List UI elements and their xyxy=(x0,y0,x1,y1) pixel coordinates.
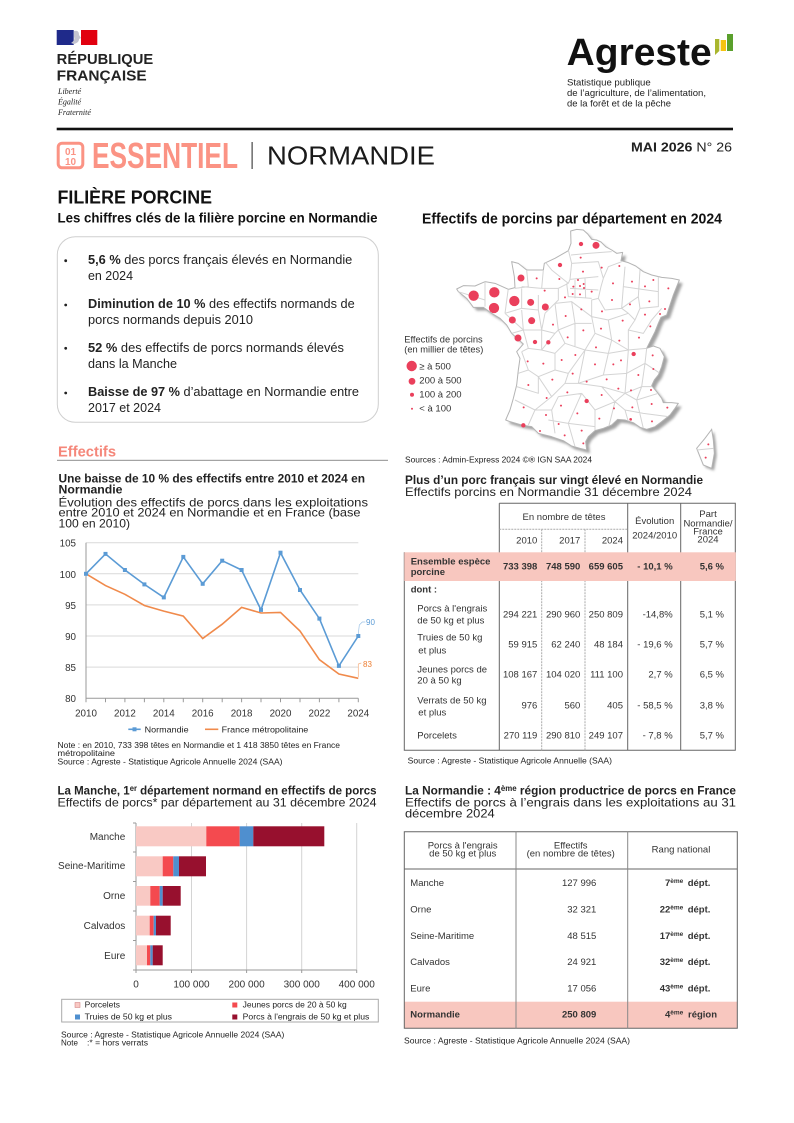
table heading: La Normandie 4ème région xyxy=(405,783,736,820)
section heading: Effectifs: Effectifs xyxy=(58,445,116,461)
row: Eure: dépt. xyxy=(688,984,710,995)
chart heading: baisse des effectifs: Évolution des effectifs de porcs dans les exploitations xyxy=(58,495,368,510)
table header: Effectifs xyxy=(554,840,588,851)
panel: key figures: 2017 et 2024 xyxy=(88,401,161,415)
category labels: Manche xyxy=(90,832,126,843)
row: Verrats xyxy=(417,696,725,719)
table header: Rang national xyxy=(652,844,710,855)
chart heading: baisse des effectifs: Normandie xyxy=(58,482,123,496)
row: Truies: Truies de 50 kg xyxy=(417,633,482,644)
map legend: 200 à 500 xyxy=(419,376,462,387)
chart legend: France métropolitaine xyxy=(222,724,309,734)
row: Normandie xyxy=(410,1010,717,1021)
row: Eure: Eure xyxy=(410,984,430,995)
chart heading: La Manche xyxy=(58,783,377,810)
row: Calvados xyxy=(410,957,710,968)
row: Seine-Maritime: ème xyxy=(670,931,684,938)
row: Ensemble espèce porcine xyxy=(411,556,725,578)
map legend: ≥ à 500 xyxy=(419,362,451,373)
table header: 2010 xyxy=(516,536,537,547)
row: Orne xyxy=(410,905,710,916)
panel: key figures: Diminution de 10 % des effectifs normands de xyxy=(88,297,355,311)
row: Porcelets: Porcelets xyxy=(417,730,457,741)
row: Truies: - 19,6 % xyxy=(637,640,673,651)
bar chart legend: Jeunes porcs de 20 à 50 kg xyxy=(243,1001,347,1010)
icon: 01 10: 01 xyxy=(65,147,76,158)
logo: Agreste: Statistique publique xyxy=(567,78,651,88)
series: France métropolitaine xyxy=(86,574,358,678)
chart heading: baisse des effectifs xyxy=(58,471,368,530)
row: Truies xyxy=(417,633,725,656)
row: Porcs à l'engrais xyxy=(417,604,725,626)
map dots: 100 to 200 xyxy=(521,242,636,427)
map heading: Effectifs de porcins par département en 2024 xyxy=(422,211,722,227)
row: Verrats: 3,8 % xyxy=(700,701,725,712)
panel: key figures: 5,6 % des porcs français élevés en Normandie xyxy=(88,253,352,267)
logo: République Française: Liberté xyxy=(57,87,82,96)
y axis labels: 85 xyxy=(65,663,77,674)
row: Eure: 17 056 xyxy=(567,984,596,995)
row: Porcs à l'engrais: 290 960 xyxy=(546,609,580,620)
row: Manche: 7 xyxy=(665,878,670,889)
chart note and source: Note : en 2010, 733 398 têtes en Normandie et 1 418 3850 têtes en France xyxy=(58,741,341,750)
row: Seine-Maritime: dépt. xyxy=(688,931,710,942)
heading: Filière porcine: FILIÈRE PORCINE xyxy=(58,187,212,208)
row: Calvados: ème xyxy=(670,957,684,964)
y axis labels: 90 xyxy=(65,632,77,643)
row: Normandie: ème xyxy=(670,1010,684,1017)
y axis labels: 80 xyxy=(65,694,77,705)
row: Ensemble espèce porcine: 748 590 xyxy=(546,562,580,573)
table header: de 50 kg et plus xyxy=(429,849,496,860)
chart heading: La Manche: er xyxy=(130,784,137,793)
table heading: La Normandie 4ème région: Effectifs de porcs à l’engrais dans les exploitations au 31 xyxy=(405,796,736,810)
logo: République Française xyxy=(57,30,154,117)
row: Porcelets: 290 810 xyxy=(546,730,580,741)
row: Manche: 127 996 xyxy=(562,878,596,889)
row: Ensemble espèce porcine: porcine xyxy=(411,567,445,578)
bar chart legend: Porcelets xyxy=(85,1001,120,1010)
row: Jeunes porcs: 104 020 xyxy=(546,670,580,681)
logo: République Française: Égalité xyxy=(57,96,82,106)
map legend: 100 à 200 xyxy=(419,390,462,401)
row: Calvados: 32 xyxy=(660,957,670,968)
row: Truies: 48 184 xyxy=(594,640,623,651)
value axis labels xyxy=(133,980,375,991)
table header: France xyxy=(693,526,723,538)
bar chart legend xyxy=(62,999,378,1022)
table heading: Plus d'un porc français: Plus d’un porc français sur vingt élevé en Normandie xyxy=(405,473,703,487)
row: Ensemble espèce porcine: 659 605 xyxy=(589,562,624,573)
table header: Part xyxy=(699,509,717,520)
x axis labels: 2022 xyxy=(309,709,330,720)
table header: Évolution xyxy=(635,516,674,527)
chart heading: La Manche: La Manche, 1 xyxy=(58,783,130,797)
row: Orne: ème xyxy=(670,905,684,912)
end labels: 83 xyxy=(363,660,372,669)
icon: 01 10: 10 xyxy=(65,157,76,168)
map legend: (en millier de têtes) xyxy=(404,344,483,355)
row: Ensemble espèce porcine: - 10,1 % xyxy=(637,562,673,573)
table header: 2017 xyxy=(559,536,580,547)
row: Eure: ème xyxy=(670,984,684,991)
table header: 2024 xyxy=(697,535,719,546)
bar chart source and note: Source : Agreste - Statistique Agricole Annuelle 2024 (SAA) xyxy=(61,1030,285,1039)
row: Porcs à l'engrais: de 50 kg et plus xyxy=(417,615,485,626)
table header: 2024 xyxy=(602,536,623,547)
table header xyxy=(428,840,710,860)
value axis labels: 0 xyxy=(133,980,139,991)
table header: 2024/2010 xyxy=(632,530,677,541)
y axis labels: 95 xyxy=(65,601,77,612)
table: rang national xyxy=(404,832,737,1028)
table heading: La Normandie 4ème région: région productrice de porcs en France xyxy=(517,783,736,797)
row: Seine-Maritime xyxy=(410,931,710,942)
row: Seine-Maritime: 17 xyxy=(660,931,670,942)
row: Manche xyxy=(410,878,710,889)
chart note and source: Source : Agreste - Statistique Agricole Annuelle 2024 (SAA) xyxy=(58,757,283,766)
value axis labels: 200 000 xyxy=(229,980,265,991)
row: Jeunes porcs: 108 167 xyxy=(503,670,537,681)
row: Porcs à l'engrais: Porcs à l'engrais xyxy=(417,604,487,615)
map dots: 200 to 500 xyxy=(509,242,599,341)
category labels: Seine-Maritime xyxy=(58,861,126,872)
bar: Calvados xyxy=(136,916,171,935)
x axis labels: 2018 xyxy=(231,709,253,720)
row: Eure: 43 xyxy=(660,984,670,995)
row: Ensemble espèce porcine: 733 398 xyxy=(503,562,537,573)
heading: Filière porcine xyxy=(58,187,378,225)
chart note and source: métropolitaine xyxy=(58,749,116,758)
row: Ensemble espèce porcine: Ensemble espèce xyxy=(411,556,490,567)
bar: Seine-Maritime xyxy=(136,856,206,876)
value axis labels: 100 000 xyxy=(173,980,210,991)
row: Truies: 62 240 xyxy=(551,640,580,651)
row: Orne: Orne xyxy=(410,905,431,916)
series: Normandie xyxy=(84,551,360,668)
table source: Source : Agreste - Statistique Agricole Annuelle (SAA) xyxy=(408,756,612,765)
row: Truies: et plus xyxy=(418,645,447,656)
row: Jeunes porcs xyxy=(417,665,725,686)
table header: (en nombre de têtes) xyxy=(527,849,615,860)
row label: dont: dont : xyxy=(411,584,437,595)
icon: 01 10 xyxy=(58,143,83,168)
category labels: Eure xyxy=(104,951,126,962)
value axis labels: 400 000 xyxy=(339,980,375,991)
map legend xyxy=(404,334,483,415)
row: Jeunes porcs: 20 à 50 kg xyxy=(417,675,462,686)
outline: Corsica xyxy=(697,429,714,468)
x axis labels: 2012 xyxy=(114,709,136,720)
bar: Orne xyxy=(136,886,181,906)
table header xyxy=(516,509,733,547)
x axis labels xyxy=(75,709,370,720)
row: Porcelets: 249 107 xyxy=(589,730,623,741)
logo: Agreste xyxy=(567,32,733,108)
row: Calvados: Calvados xyxy=(410,957,450,968)
row: Normandie: région xyxy=(688,1010,717,1021)
table header: Porcs à l'engrais xyxy=(428,840,498,851)
row: Jeunes porcs: Jeunes porcs de xyxy=(417,665,487,676)
row: Verrats: - 58,5 % xyxy=(637,701,673,712)
row: Jeunes porcs: 6,5 % xyxy=(700,670,725,681)
panel: key figures xyxy=(57,237,378,422)
row: Eure xyxy=(410,984,710,995)
x axis labels: 2024 xyxy=(347,709,370,720)
table heading: La Normandie 4ème région: La Normandie : 4 xyxy=(405,783,501,797)
table heading: La Normandie 4ème région: ème xyxy=(501,784,517,793)
stacked bar chart xyxy=(58,823,375,991)
chart legend: Normandie xyxy=(145,724,189,734)
row: Porcelets xyxy=(417,730,725,741)
chart heading: La Manche: Effectifs de porcs* par département au 31 décembre 2024 xyxy=(58,796,377,810)
row: Seine-Maritime: 48 515 xyxy=(567,931,596,942)
map source: Sources : Admin-Express 2024 ©® IGN SAA 2024 xyxy=(405,455,593,464)
map legend: < à 100 xyxy=(419,404,451,415)
chart heading: baisse des effectifs: 100 en 2010) xyxy=(58,516,130,530)
table header: En nombre de têtes xyxy=(523,512,606,523)
map dots: under 100 xyxy=(523,257,709,459)
chart heading: La Manche: département normand en effectifs de porcs xyxy=(137,783,377,797)
bar chart source and note xyxy=(61,1030,285,1047)
table: effectifs porcins xyxy=(404,503,736,750)
logo: République Française: FRANÇAISE xyxy=(57,68,147,84)
row: Seine-Maritime: Seine-Maritime xyxy=(410,931,474,942)
chart note and source xyxy=(58,741,341,766)
bar chart source and note: :* = hors verrats xyxy=(87,1038,148,1047)
panel: key figures: dans la Manche xyxy=(88,357,177,371)
y axis labels: 100 xyxy=(60,570,77,581)
row: Truies: 5,7 % xyxy=(700,640,725,651)
row: Normandie: 250 809 xyxy=(562,1010,596,1021)
panel: key figures: 52 % des effectifs de porcs normands élevés xyxy=(88,341,344,355)
category labels: Orne xyxy=(103,891,126,902)
x axis labels: 2020 xyxy=(270,709,292,720)
row: Verrats: Verrats de 50 kg xyxy=(417,696,486,707)
row: Verrats: et plus xyxy=(418,708,447,719)
row: Manche: ème xyxy=(670,878,684,885)
y axis labels xyxy=(60,539,77,705)
row: Jeunes porcs: 111 100 xyxy=(590,670,623,681)
logo: Agreste: de la forêt et de la pêche xyxy=(567,98,671,108)
value axis labels: 300 000 xyxy=(284,980,320,991)
row: Orne: 32 321 xyxy=(567,905,596,916)
table source: Source : Agreste - Statistique Agricole Annuelle 2024 (SAA) xyxy=(404,1036,630,1045)
map dots: at least 500 xyxy=(468,287,519,313)
panel: key figures: en 2024 xyxy=(88,269,133,283)
bar chart legend: Truies de 50 kg et plus xyxy=(85,1012,172,1022)
bar: Eure xyxy=(136,945,163,965)
x axis labels: 2016 xyxy=(192,709,214,720)
row: Jeunes porcs: 2,7 % xyxy=(648,670,673,681)
logo: République Française: Fraternité xyxy=(57,108,91,117)
row: Manche: dépt. xyxy=(688,878,710,889)
bar chart source and note: Note xyxy=(61,1038,78,1047)
row: Porcelets: 270 119 xyxy=(504,730,537,741)
bar chart legend: Porcs à l'engrais de 50 kg et plus xyxy=(243,1012,369,1022)
banner: Essentiel Normandie: ESSENTIEL xyxy=(92,135,238,176)
row: Porcelets: - 7,8 % xyxy=(643,730,673,741)
x axis labels: 2010 xyxy=(75,709,97,720)
banner: Essentiel Normandie: NORMANDIE xyxy=(267,141,435,171)
category labels xyxy=(58,832,126,962)
issue date: MAI 2026 N° 26 xyxy=(631,140,732,154)
bar: Manche xyxy=(136,826,324,846)
chart heading: baisse des effectifs: Une baisse de 10 % des effectifs entre 2010 et 2024 en xyxy=(58,471,365,485)
table heading: La Normandie 4ème région: décembre 2024 xyxy=(405,806,495,820)
row: Calvados: 24 921 xyxy=(567,957,596,968)
panel: key figures: Baisse de 97 % d’abattage en Normandie entre xyxy=(88,385,359,399)
heading: Filière porcine: Les chiffres clés de la filière porcine en Normandie xyxy=(58,209,378,225)
row: Porcs à l'engrais: 5,1 % xyxy=(700,609,725,620)
row: Normandie: 4 xyxy=(665,1010,670,1021)
end labels: 90 xyxy=(366,618,375,627)
row: Truies: 59 915 xyxy=(508,640,537,651)
row: Manche: Manche xyxy=(410,878,444,889)
row: Porcelets: 5,7 % xyxy=(700,730,725,741)
panel: key figures: porcs normands depuis 2010 xyxy=(88,313,253,327)
chart legend xyxy=(128,724,309,734)
table heading: Plus d'un porc français xyxy=(405,473,703,499)
x axis labels: 2014 xyxy=(153,709,175,720)
category labels: Calvados xyxy=(84,921,125,932)
table header: Normandie/ xyxy=(683,519,733,530)
row: Porcs à l'engrais: 250 809 xyxy=(589,609,623,620)
row: Calvados: dépt. xyxy=(688,957,710,968)
chart heading: baisse des effectifs: entre 2010 et 2024 en Normandie et en France (base xyxy=(58,506,361,520)
banner: Essentiel Normandie xyxy=(58,135,435,176)
logo: Agreste: de l’agriculture, de l’alimentation, xyxy=(567,88,706,98)
map legend: Effectifs de porcins xyxy=(404,334,483,345)
row: Verrats: 976 xyxy=(521,701,537,712)
end labels xyxy=(358,618,375,677)
row: Orne: dépt. xyxy=(688,905,710,916)
row: Ensemble espèce porcine: 5,6 % xyxy=(700,562,725,573)
row: Normandie: Normandie xyxy=(410,1010,460,1021)
row: Orne: 22 xyxy=(660,905,670,916)
line chart: Normandie vs France xyxy=(60,539,375,734)
logo: République Française: RÉPUBLIQUE xyxy=(57,51,154,68)
table heading: Plus d'un porc français: Effectifs porcins en Normandie 31 décembre 2024 xyxy=(405,485,692,499)
row: Porcs à l'engrais: 294 221 xyxy=(503,609,537,620)
map: France départements xyxy=(457,229,717,471)
row: Verrats: 405 xyxy=(607,701,623,712)
row: Porcs à l'engrais: -14,8% xyxy=(643,609,673,620)
y axis labels: 105 xyxy=(60,539,77,550)
logo: Agreste: Agreste xyxy=(567,32,712,74)
row: Verrats: 560 xyxy=(564,701,580,712)
